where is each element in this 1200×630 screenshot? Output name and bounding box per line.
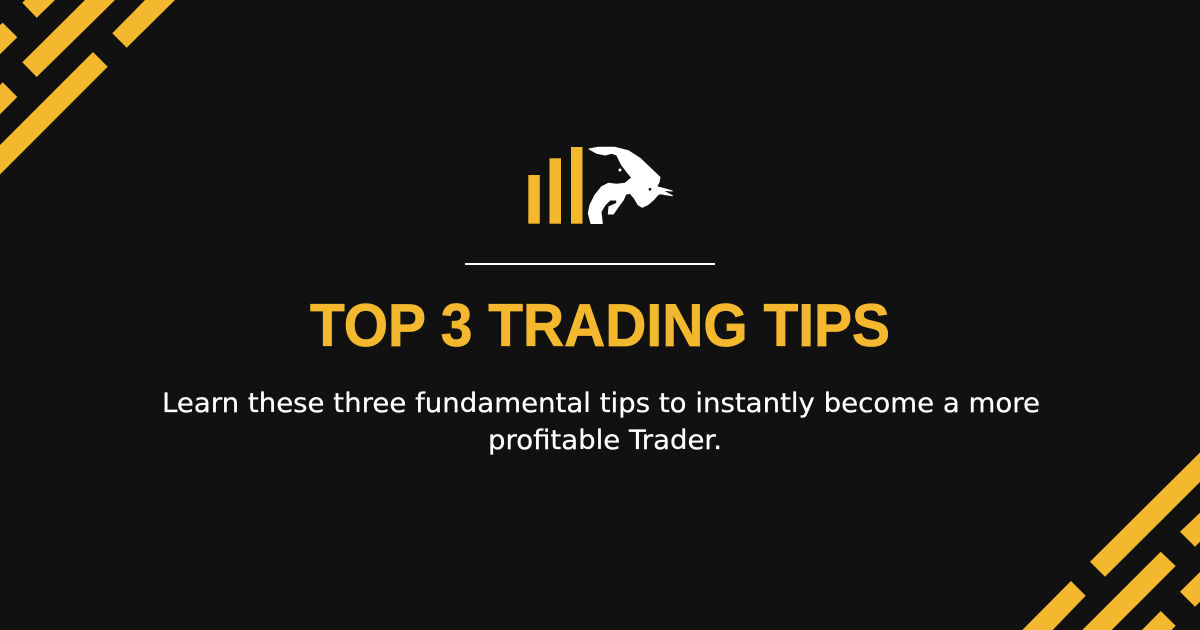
subtitle [162,388,1040,456]
icon: white bull [588,147,672,224]
subtitle: profitable Trader. [488,425,722,456]
subtitle: Learn these three fundamental tips to instantly become a more [162,388,1040,419]
logo: rising bars and bull [528,147,672,224]
bottom-right diagonal stripes [1022,452,1200,630]
title: TOP 3 TRADING TIPS [310,292,890,359]
icon: rising bars [528,147,582,224]
divider line [465,263,715,265]
top-left diagonal stripes [0,0,175,174]
